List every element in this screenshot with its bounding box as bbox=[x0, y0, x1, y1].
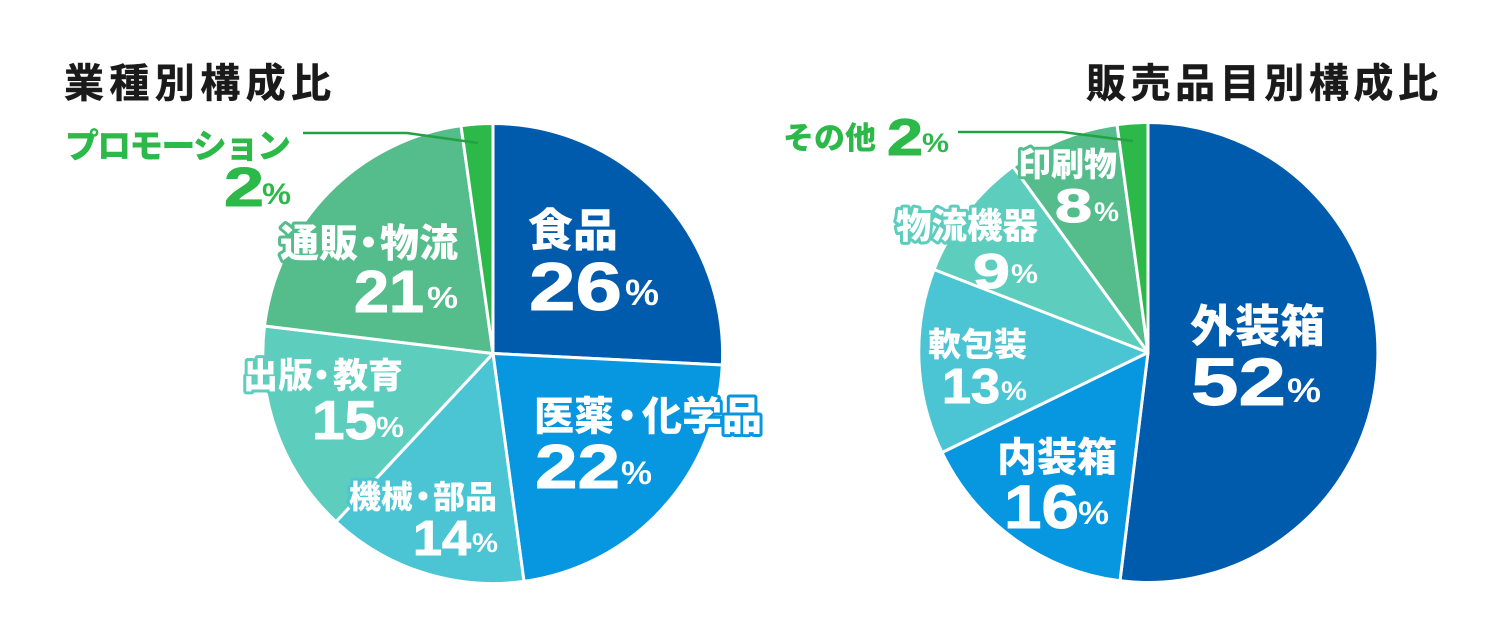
slice: promotion 2% bbox=[461, 123, 493, 354]
label: publishing and education 15%: ・ bbox=[304, 348, 339, 399]
label: publishing and education 15%: % bbox=[376, 412, 404, 444]
label: outer box 52%: 52 bbox=[1191, 345, 1286, 420]
label: food 26%: 26 bbox=[529, 249, 622, 325]
label: logistics equipment 9%: 物流機器 bbox=[896, 198, 1039, 249]
label: publishing and education 15%: 15 bbox=[312, 389, 377, 451]
slice: printed matter 8% bbox=[1013, 125, 1148, 352]
label: machinery and parts 14%: 機械 bbox=[349, 472, 413, 518]
label: pharma and chemical 22%: 医薬 bbox=[534, 384, 614, 442]
label: logistics equipment 9%: 9 bbox=[973, 245, 1010, 299]
label: machinery and parts 14%: 部品 bbox=[433, 472, 497, 518]
label: mail order and logistics 21%: 通販 bbox=[280, 213, 358, 269]
label: mail order and logistics 21%: ・ bbox=[349, 213, 388, 269]
label: printed matter 8% bbox=[1018, 138, 1119, 232]
label: pharma and chemical 22%: ・ bbox=[607, 384, 647, 442]
slice: mail order and logistics 21% bbox=[264, 126, 493, 354]
label: outer box 52%: 外装箱 bbox=[1190, 290, 1325, 355]
label: promotion 2% bbox=[65, 119, 291, 218]
label: printed matter 8%: 印刷物 bbox=[1018, 138, 1117, 186]
label: food 26%: % bbox=[625, 272, 659, 313]
label: promotion 2%: プロモーション bbox=[65, 119, 291, 168]
label: publishing and education 15%: 教育 bbox=[333, 348, 403, 399]
label: other 2% bbox=[783, 109, 949, 167]
label: inner box 16%: 内装箱 bbox=[997, 425, 1117, 483]
label: logistics equipment 9%: % bbox=[1011, 259, 1038, 289]
label: flexible packaging 13%: 13 bbox=[942, 360, 1000, 414]
slice: food 26% bbox=[493, 124, 723, 365]
slice: inner box 16% bbox=[942, 352, 1148, 581]
label: flexible packaging 13% bbox=[928, 318, 1027, 414]
leader line: promotion bbox=[303, 133, 478, 143]
label: inner box 16%: 16 bbox=[1004, 473, 1079, 541]
label: promotion 2%: 2 bbox=[224, 156, 264, 218]
label: machinery and parts 14% bbox=[349, 472, 498, 566]
label: outer box 52%: % bbox=[1287, 372, 1321, 410]
label: other 2%: 2 bbox=[887, 109, 923, 167]
label: inner box 16%: % bbox=[1078, 495, 1109, 531]
label: pharma and chemical 22%: 化学品 bbox=[642, 384, 762, 442]
title: industry composition: 業種別構成比 bbox=[64, 51, 331, 109]
label: pharma and chemical 22%: % bbox=[621, 455, 652, 491]
label: mail order and logistics 21%: 物流 bbox=[380, 213, 458, 269]
slice: publishing and education 15% bbox=[263, 326, 493, 522]
pie chart: products bbox=[919, 122, 1378, 582]
label: machinery and parts 14%: 14 bbox=[413, 512, 471, 566]
slice: other 2% bbox=[1117, 122, 1148, 352]
label: machinery and parts 14%: ・ bbox=[407, 472, 439, 518]
label: printed matter 8%: 8 bbox=[1055, 179, 1092, 232]
label: machinery and parts 14%: % bbox=[472, 528, 498, 558]
label: mail order and logistics 21%: 21 bbox=[354, 259, 424, 325]
label: food 26%: 食品 bbox=[528, 194, 618, 259]
label: logistics equipment 9% bbox=[896, 198, 1039, 299]
pie chart: industry bbox=[263, 123, 723, 584]
label: flexible packaging 13%: 軟包装 bbox=[928, 318, 1027, 366]
label: publishing and education 15%: 出版 bbox=[243, 348, 313, 399]
slice: machinery and parts 14% bbox=[336, 354, 524, 584]
slice: pharma and chemical 22% bbox=[493, 354, 722, 581]
label: other 2%: % bbox=[922, 128, 949, 158]
label: other 2%: その他 bbox=[783, 113, 876, 158]
slice: logistics equipment 9% bbox=[934, 166, 1148, 352]
label: outer box 52% bbox=[1190, 290, 1325, 420]
label: food 26% bbox=[528, 194, 659, 325]
label: pharma and chemical 22%: 22 bbox=[535, 433, 620, 502]
label: publishing and education 15% bbox=[243, 348, 404, 451]
label: flexible packaging 13%: % bbox=[1001, 376, 1027, 406]
label: mail order and logistics 21% bbox=[280, 213, 458, 325]
slice: flexible packaging 13% bbox=[919, 270, 1148, 452]
label: mail order and logistics 21%: % bbox=[427, 280, 458, 315]
label: pharma and chemical 22% bbox=[534, 384, 762, 502]
slice: outer box 52% bbox=[1120, 122, 1378, 582]
leader line: other bbox=[958, 132, 1133, 141]
label: printed matter 8%: % bbox=[1094, 197, 1119, 227]
label: inner box 16% bbox=[997, 425, 1117, 541]
label: promotion 2%: % bbox=[262, 178, 291, 211]
title: product composition: 販売品目別構成比 bbox=[1086, 51, 1438, 109]
